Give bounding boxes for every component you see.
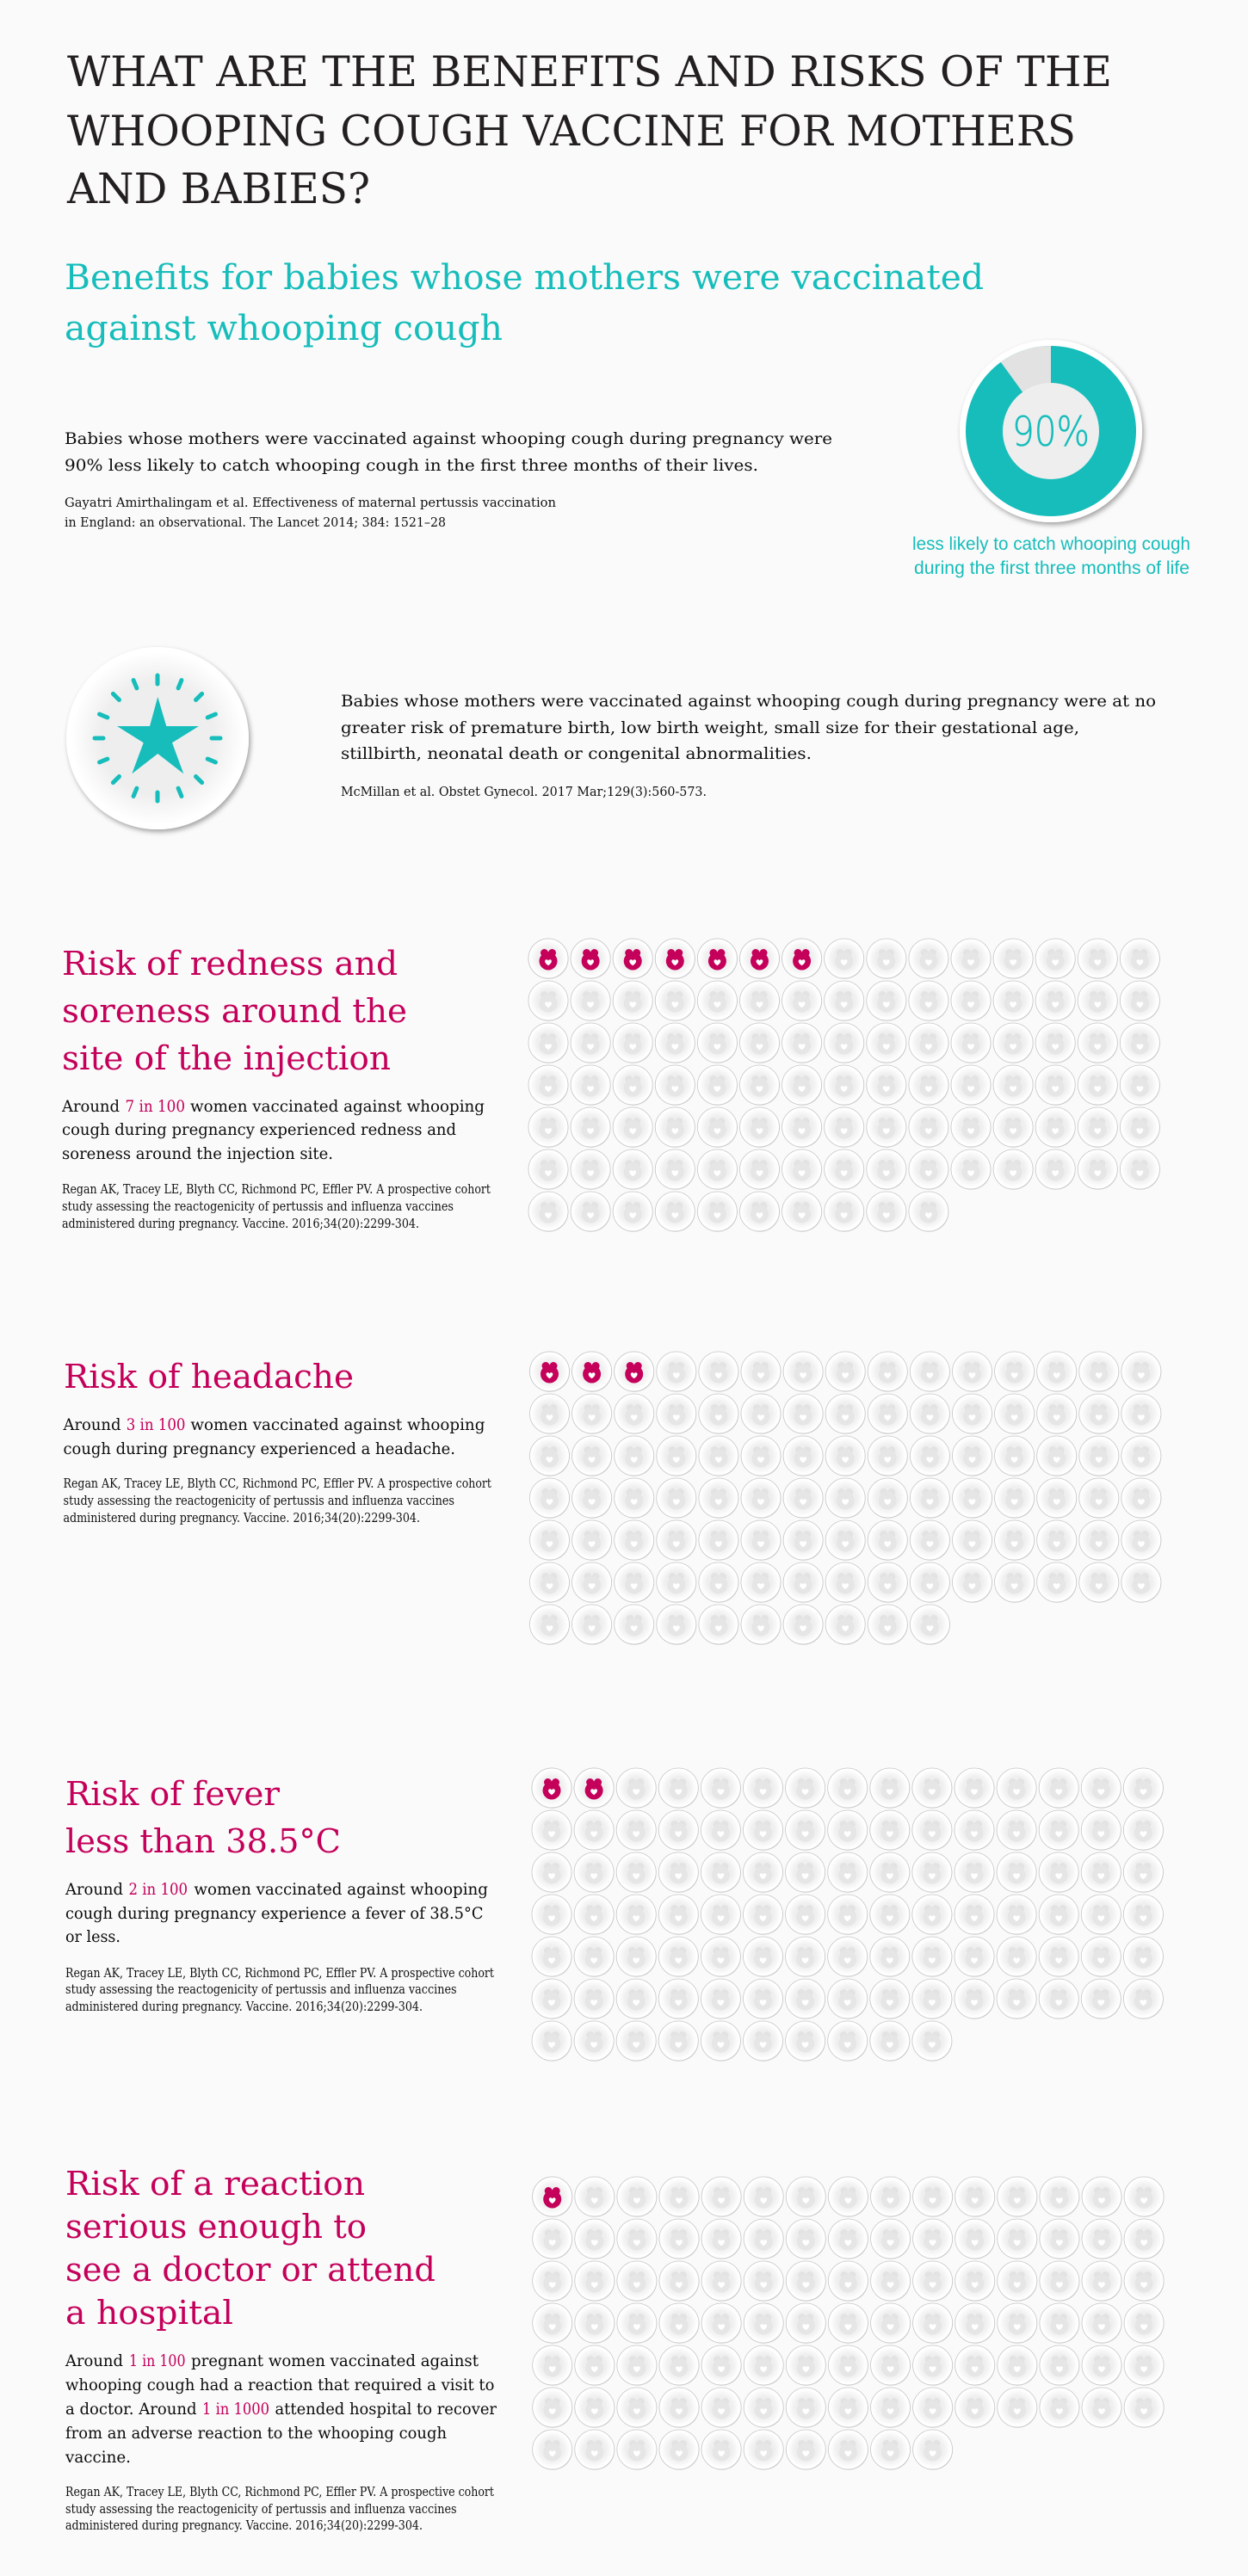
title: WHOOPING COUGH VACCINE FOR MOTHERS xyxy=(67,107,1076,156)
text block: 3 in 100: women vaccinated against whooping xyxy=(190,1415,485,1434)
text block: 2 in 100: Around xyxy=(65,1880,123,1899)
pictogram: 2 of 100 xyxy=(532,1768,1164,2061)
heading: serious reaction: Risk of a reaction xyxy=(65,2165,365,2203)
text block: 2 in 100: cough during pregnancy experience a fever of 38.5°C xyxy=(65,1904,484,1923)
icon: star badge xyxy=(66,647,249,829)
text block: 7 in 100: soreness around the injection site. xyxy=(62,1144,333,1163)
pictogram: 1 of 100 xyxy=(533,2177,1164,2470)
heading: benefits for babies: Benefits for babies whose mothers were vaccinated xyxy=(65,258,984,298)
text block: no greater risk statement xyxy=(341,692,1156,763)
text block: 3 in 100: cough during pregnancy experienced a headache. xyxy=(64,1439,455,1458)
text block: 2 in 100: 2 in 100 xyxy=(129,1880,188,1899)
panel: risk of serious reaction xyxy=(65,2165,1165,2533)
heading: fever: Risk of fever xyxy=(65,1775,281,1813)
heading: redness and soreness: soreness around the xyxy=(62,992,407,1030)
text block: 90% less likely statement: 90% less likely to catch whooping cough in the first three months of their lives. xyxy=(65,456,758,475)
text block: 1 in 100 and 1 in 1000: from an adverse reaction to the whooping cough xyxy=(65,2424,447,2443)
text block: 7 in 100 xyxy=(61,1097,485,1163)
text block: 2 in 100 xyxy=(65,1880,488,1946)
text block: 1 in 100 and 1 in 1000: a doctor. Around xyxy=(65,2400,196,2419)
title: AND BABIES? xyxy=(66,164,370,213)
citation: Regan: administered during pregnancy. Vaccine. 2016;34(20):2299-304. xyxy=(62,1217,419,1231)
text block: no greater risk statement: greater risk of premature birth, low birth weight, small size for their gestational age, xyxy=(341,718,1079,737)
citation: Regan: administered during pregnancy. Vaccine. 2016;34(20):2299-304. xyxy=(64,1512,420,1525)
text block: 7 in 100: 7 in 100 xyxy=(126,1097,185,1116)
text block: 2 in 100: women vaccinated against whooping xyxy=(194,1880,488,1899)
citation: Regan: Regan AK, Tracey LE, Blyth CC, Richmond PC, Effler PV. A prospective cohort xyxy=(65,2486,494,2499)
text block: 3 in 100: Around xyxy=(63,1415,120,1434)
citation: Regan: Regan AK, Tracey LE, Blyth CC, Richmond PC, Effler PV. A prospective cohort xyxy=(64,1477,491,1491)
text block: 1 in 100 and 1 in 1000 xyxy=(65,2351,497,2467)
text block: 90% less likely statement: Babies whose mothers were vaccinated against whooping cough during pregnancy were xyxy=(65,429,832,448)
text block: 1 in 100 and 1 in 1000: pregnant women vaccinated against xyxy=(191,2351,479,2370)
heading: redness and soreness: site of the injection xyxy=(62,1039,391,1077)
text block: 1 in 100 and 1 in 1000: attended hospital to recover xyxy=(275,2400,497,2419)
text block: 3 in 100: 3 in 100 xyxy=(127,1415,186,1434)
citation: Regan: Regan AK, Tracey LE, Blyth CC, Richmond PC, Effler PV. A prospective cohort xyxy=(65,1967,494,1981)
heading: redness and soreness: Risk of redness and xyxy=(62,945,398,983)
heading: fever xyxy=(65,1775,341,1860)
citation: Regan: administered during pregnancy. Vaccine. 2016;34(20):2299-304. xyxy=(65,2000,423,2014)
donut chart: 90%: 90% xyxy=(1012,409,1090,456)
citation: Regan: study assessing the reactogenicity of pertussis and influenza vaccines xyxy=(65,1983,457,1997)
panel: risk of fever xyxy=(65,1768,1164,2061)
title: WHAT ARE THE BENEFITS AND RISKS OF THE xyxy=(67,47,1112,96)
text block: 7 in 100: cough during pregnancy experienced redness and xyxy=(62,1120,456,1139)
citation: Regan: study assessing the reactogenicity of pertussis and influenza vaccines xyxy=(64,1494,454,1508)
citation: Regan xyxy=(65,2486,494,2533)
text block: 1 in 100 and 1 in 1000: Around xyxy=(65,2351,123,2370)
donut caption: during the first three months of life xyxy=(914,558,1189,578)
heading: benefits for babies xyxy=(65,258,984,348)
heading: benefits for babies: against whooping cough xyxy=(65,309,503,348)
text block: 1 in 100 and 1 in 1000: 1 in 1000 xyxy=(202,2400,269,2419)
citation: Regan: study assessing the reactogenicity of pertussis and influenza vaccines xyxy=(65,2503,457,2517)
citation: Regan: study assessing the reactogenicity of pertussis and influenza vaccines xyxy=(62,1200,454,1214)
donut caption xyxy=(912,534,1190,578)
citation: Regan xyxy=(62,1183,491,1231)
citation: Regan: administered during pregnancy. Vaccine. 2016;34(20):2299-304. xyxy=(65,2519,423,2533)
heading: serious reaction: see a doctor or attend xyxy=(65,2251,436,2289)
text block: 2 in 100: or less. xyxy=(65,1927,120,1946)
heading: serious reaction: serious enough to xyxy=(65,2208,367,2246)
text block: 1 in 100 and 1 in 1000: 1 in 100 xyxy=(129,2351,186,2370)
panel: no greater risk xyxy=(66,647,1156,829)
text block: 1 in 100 and 1 in 1000: vaccine. xyxy=(65,2448,131,2467)
citation: Regan xyxy=(64,1477,491,1525)
text block: 1 in 100 and 1 in 1000: whooping cough had a reaction that required a visit to xyxy=(65,2376,494,2394)
heading: headache: Risk of headache xyxy=(64,1358,354,1396)
citation: Amirthalingam: Gayatri Amirthalingam et al. Effectiveness of maternal pertussis vaccination xyxy=(65,496,556,510)
panel: 90% less likely xyxy=(65,340,1190,578)
text block: 3 in 100 xyxy=(63,1415,485,1458)
donut chart: 90% xyxy=(960,340,1142,522)
title xyxy=(66,47,1112,213)
heading: redness and soreness xyxy=(62,945,407,1077)
citation: Amirthalingam xyxy=(65,496,556,530)
text block: no greater risk statement: stillbirth, neonatal death or congenital abnormalities. xyxy=(341,744,812,763)
donut caption: less likely to catch whooping cough xyxy=(912,534,1190,554)
heading: fever: less than 38.5°C xyxy=(65,1822,341,1860)
text block: no greater risk statement: Babies whose mothers were vaccinated against whooping cough during pregnancy were at no xyxy=(341,692,1156,711)
heading: serious reaction: a hospital xyxy=(65,2294,233,2332)
pictogram: 3 of 100 xyxy=(530,1352,1161,1645)
pictogram: 7 of 100 xyxy=(528,939,1160,1232)
citation: Regan: Regan AK, Tracey LE, Blyth CC, Richmond PC, Effler PV. A prospective cohort xyxy=(62,1183,491,1197)
panel: risk of headache xyxy=(63,1352,1161,1645)
citation: McMillan: McMillan et al. Obstet Gynecol. 2017 Mar;129(3):560-573. xyxy=(341,786,707,799)
panel: risk of redness and soreness xyxy=(61,939,1160,1232)
heading: serious reaction xyxy=(65,2165,436,2332)
text block: 90% less likely statement xyxy=(65,429,832,475)
text block: 7 in 100: Around xyxy=(61,1097,120,1116)
citation: Regan xyxy=(65,1967,494,2014)
citation: Amirthalingam: in England: an observational. The Lancet 2014; 384: 1521–28 xyxy=(65,516,446,530)
text block: 7 in 100: women vaccinated against whooping xyxy=(190,1097,485,1116)
